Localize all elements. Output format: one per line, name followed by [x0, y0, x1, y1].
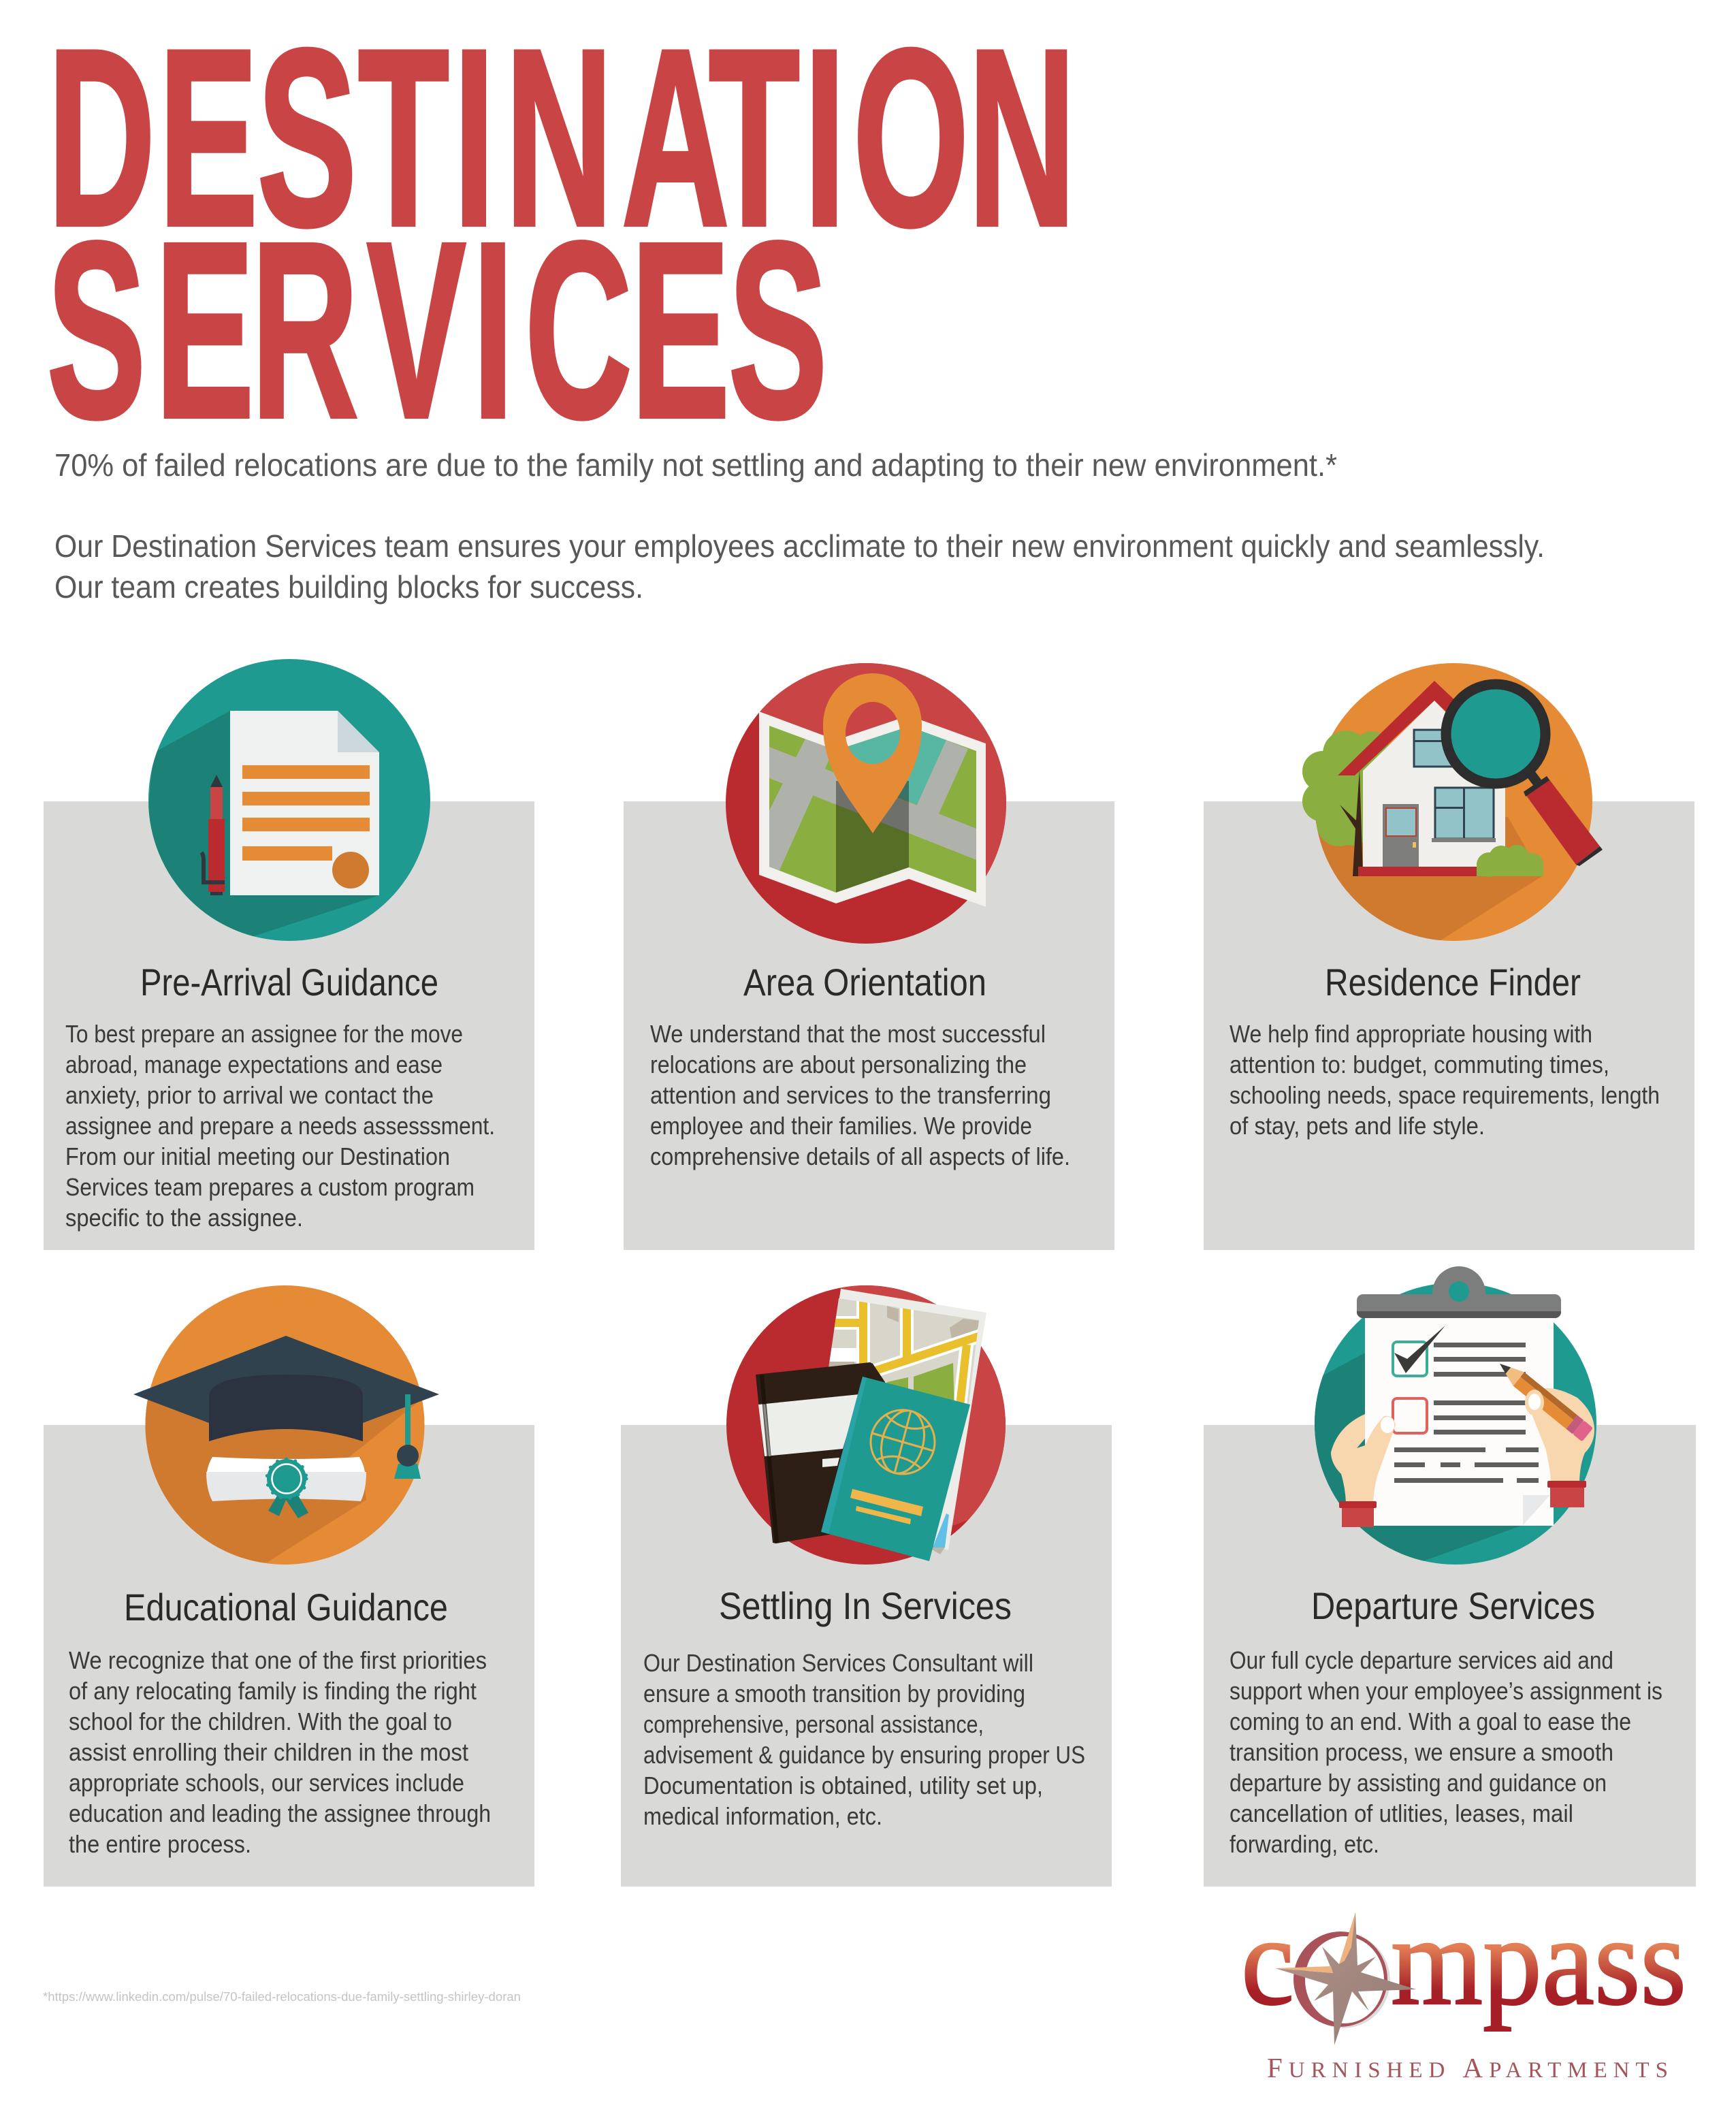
body text: education and leading the assignee through — [69, 1799, 491, 1827]
body text: assist enrolling their children in the most — [69, 1738, 468, 1766]
icon: map, notebook and passport — [726, 1283, 1021, 1565]
icon: right hand and pencil — [1494, 1357, 1594, 1507]
body text: school for the children. With the goal to — [69, 1708, 452, 1735]
body text: Services team prepares a custom program — [65, 1173, 475, 1201]
body text: We help find appropriate housing with — [1229, 1020, 1592, 1048]
body text: ensure a smooth transition by providing — [643, 1680, 1025, 1708]
title — [47, 0, 1076, 470]
body text: comprehensive details of all aspects of life. — [650, 1142, 1070, 1170]
panel: settling in services — [621, 1283, 1112, 1887]
body text: the entire process. — [69, 1830, 251, 1858]
body text: cancellation of utlities, leases, mail — [1229, 1799, 1573, 1827]
body text — [65, 1020, 495, 1232]
body text: Documentation is obtained, utility set up, — [643, 1772, 1043, 1799]
body text — [69, 1646, 491, 1858]
icon: clipboard checklist — [1311, 1266, 1596, 1565]
footnote: *https://www.linkedin.com/pulse/70-failed-relocations-due-family-settling-shirley-doran — [43, 1990, 521, 2004]
body text: transition process, we ensure a smooth — [1229, 1738, 1613, 1766]
icon: magnifier — [1446, 684, 1603, 866]
body text: comprehensive, personal assistance, — [643, 1710, 984, 1738]
body text: assignee and prepare a needs assesssment. — [65, 1112, 495, 1140]
body text: employee and their families. We provide — [650, 1112, 1032, 1140]
logo wordmark: c — [1241, 1891, 1294, 2032]
body text: of any relocating family is finding the right — [69, 1677, 477, 1705]
body text: abroad, manage expectations and ease — [65, 1051, 443, 1078]
intro text: Our Destination Services team ensures your employees acclimate to their new environment quickly and seamlessly. — [54, 528, 1545, 564]
body text — [1229, 1020, 1660, 1140]
intro text — [54, 447, 1545, 605]
logo compass ring and star — [1275, 1912, 1416, 2045]
body text: departure by assisting and guidance on — [1229, 1769, 1607, 1797]
heading: Pre-Arrival Guidance — [140, 961, 438, 1004]
panel: area orientation — [624, 654, 1114, 1250]
icon: house and magnifier — [1293, 663, 1603, 943]
logo wordmark: mpass — [1391, 1891, 1686, 2032]
icon: location pin — [823, 673, 922, 833]
icon: passport — [821, 1377, 970, 1561]
heading: Area Orientation — [743, 961, 986, 1004]
body text: specific to the assignee. — [65, 1204, 303, 1232]
body text: attention to: budget, commuting times, — [1229, 1051, 1609, 1078]
icon: clip — [1357, 1266, 1561, 1318]
heading: Departure Services — [1311, 1584, 1595, 1627]
body text — [643, 1649, 1085, 1830]
body text: medical information, etc. — [643, 1802, 882, 1830]
body text — [650, 1020, 1070, 1170]
icon: left hand — [1331, 1414, 1396, 1527]
icon: document and pen — [136, 659, 430, 953]
body text: attention and services to the transferring — [650, 1081, 1051, 1109]
body text: advisement & guidance by ensuring proper US — [643, 1741, 1085, 1769]
heading: Residence Finder — [1325, 961, 1581, 1004]
body text: appropriate schools, our services include — [69, 1769, 464, 1797]
body text: coming to an end. With a goal to ease the — [1229, 1708, 1631, 1735]
body text: of stay, pets and life style. — [1229, 1112, 1485, 1140]
body text: schooling needs, space requirements, length — [1229, 1081, 1660, 1109]
intro text: Our team creates building blocks for success. — [54, 569, 643, 605]
body text: We recognize that one of the first priorities — [69, 1646, 487, 1674]
heading: Educational Guidance — [124, 1586, 448, 1629]
body text: To best prepare an assignee for the move — [65, 1020, 463, 1048]
panel: pre-arrival guidance — [44, 659, 534, 1250]
body text: Our full cycle departure services aid and — [1229, 1646, 1613, 1674]
heading: Settling In Services — [719, 1584, 1012, 1627]
body text: forwarding, etc. — [1229, 1830, 1379, 1858]
body text: anxiety, prior to arrival we contact the — [65, 1081, 434, 1109]
icon: graduation cap and diploma — [133, 1285, 439, 1566]
title: DESTINATION — [48, 0, 1076, 278]
intro text: 70% of failed relocations are due to the family not settling and adapting to their new environment.* — [54, 447, 1337, 483]
icon: map and pin — [726, 663, 1006, 944]
body text: From our initial meeting our Destination — [65, 1142, 450, 1170]
body text: relocations are about personalizing the — [650, 1051, 1027, 1078]
panel: educational guidance — [44, 1285, 534, 1887]
title: SERVICES — [47, 191, 827, 470]
logo wordmark — [1241, 1891, 1686, 2032]
body text: We understand that the most successful — [650, 1020, 1046, 1048]
body text — [1229, 1646, 1662, 1858]
logo tagline: F URNISHED A PARTMENTS — [1267, 2052, 1668, 2083]
body text: support when your employee’s assignment is — [1229, 1677, 1662, 1705]
body text: Our Destination Services Consultant will — [643, 1649, 1033, 1677]
icon: notebook — [756, 1362, 885, 1543]
panel: departure services — [1204, 1266, 1696, 1887]
panel: residence finder — [1204, 663, 1694, 1250]
logo: compass furnished apartments — [1241, 1891, 1686, 2083]
